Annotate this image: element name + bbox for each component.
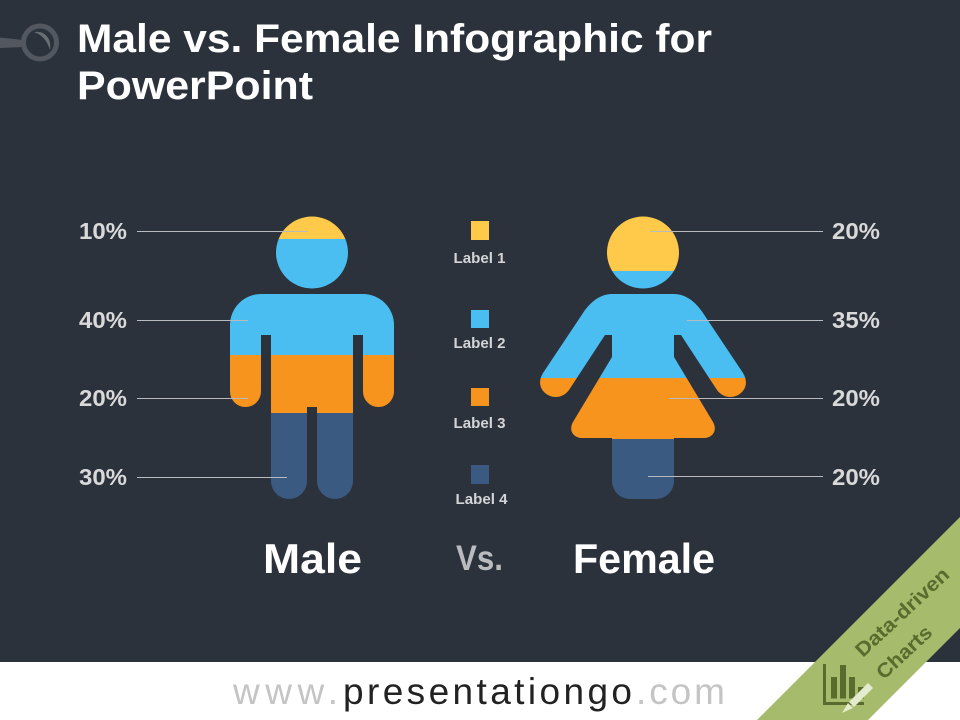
legend	[454, 221, 508, 508]
heading: Vs.: Vs.	[456, 539, 503, 578]
icon: pencil	[842, 683, 873, 713]
title: Male vs. Female Infographic for	[77, 17, 712, 61]
female percentages: 20%	[832, 464, 880, 490]
legend item 1: Label 1	[454, 250, 506, 267]
female leader lines	[648, 232, 823, 476]
heading: Female: Female	[573, 535, 715, 582]
female figure	[540, 216, 746, 499]
banner text: Charts	[872, 621, 937, 684]
male percentages: 30%	[79, 464, 127, 490]
legend item 1	[454, 221, 506, 267]
legend item 4	[456, 465, 508, 508]
female percentages	[832, 218, 880, 490]
footer website text: presentationgo	[343, 671, 632, 712]
male leader lines	[137, 232, 308, 478]
female percentages: 20%	[832, 385, 880, 411]
title: PowerPoint	[77, 64, 313, 108]
female percentages: 35%	[832, 307, 880, 333]
male figure	[230, 216, 394, 499]
footer website text: www.	[232, 671, 338, 712]
legend item 3: Label 3	[454, 415, 506, 432]
logo: magnifier ring	[0, 26, 56, 59]
male percentages: 10%	[79, 218, 127, 244]
legend item 2: Label 2	[454, 335, 506, 352]
banner text: Data-driven	[851, 564, 954, 662]
male percentages: 40%	[79, 307, 127, 333]
footer bar	[0, 662, 960, 720]
footer website text	[232, 671, 725, 712]
male percentages: 20%	[79, 385, 127, 411]
icon: bar chart	[823, 664, 864, 705]
heading: Male: Male	[263, 535, 362, 582]
corner banner	[757, 517, 960, 720]
male percentages	[79, 218, 127, 490]
footer website text: .com	[636, 671, 725, 712]
female percentages: 20%	[832, 218, 880, 244]
legend item 3	[454, 388, 506, 432]
legend item 2	[454, 310, 506, 352]
legend item 4: Label 4	[456, 491, 508, 508]
